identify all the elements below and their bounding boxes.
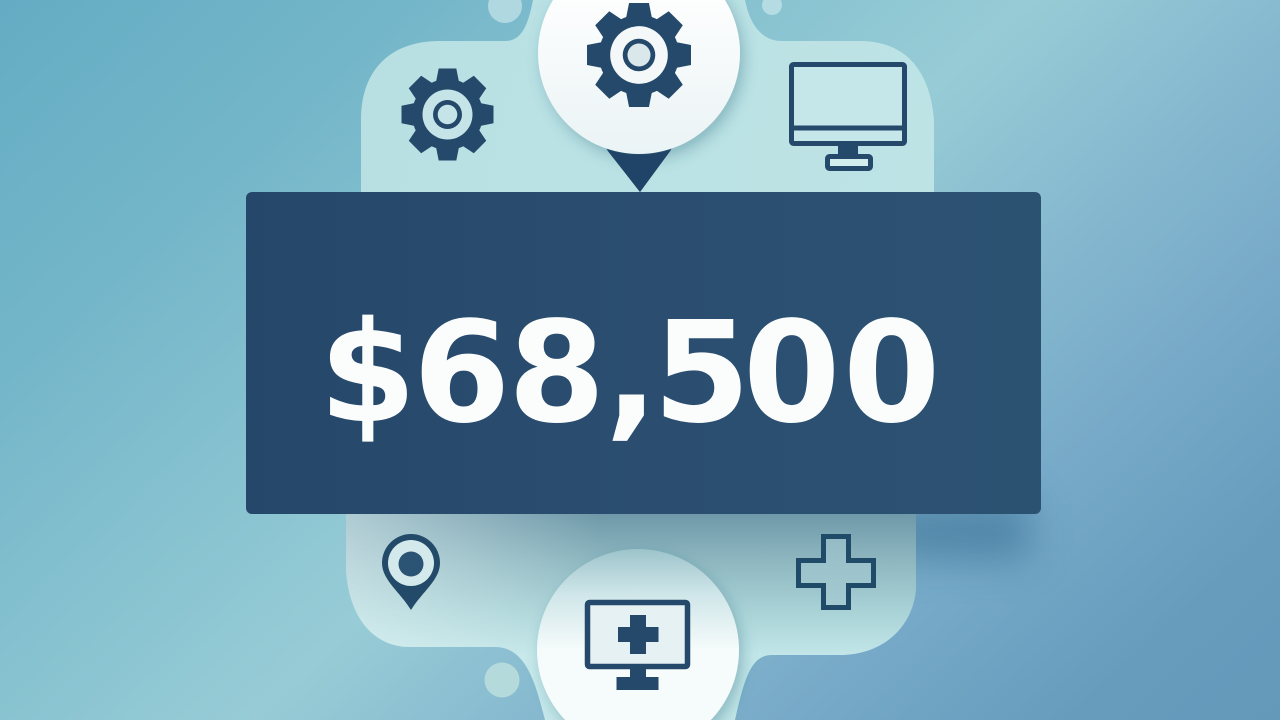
icon: gear left xyxy=(402,68,494,160)
bottom circle xyxy=(537,549,739,720)
value: $68,500 xyxy=(319,292,940,455)
icon: monitor with cross xyxy=(588,602,688,690)
panel: lower backing xyxy=(346,505,916,720)
icon: monitor xyxy=(791,64,905,168)
banner xyxy=(246,192,1041,514)
top circle with pointer xyxy=(538,0,740,192)
icon: gear top xyxy=(587,3,691,107)
soft shadow under banner xyxy=(880,500,1030,560)
icon: medical cross xyxy=(798,536,874,608)
decorative dots xyxy=(484,0,782,698)
icon: location pin xyxy=(382,534,440,610)
panel: upper backing xyxy=(361,0,934,200)
